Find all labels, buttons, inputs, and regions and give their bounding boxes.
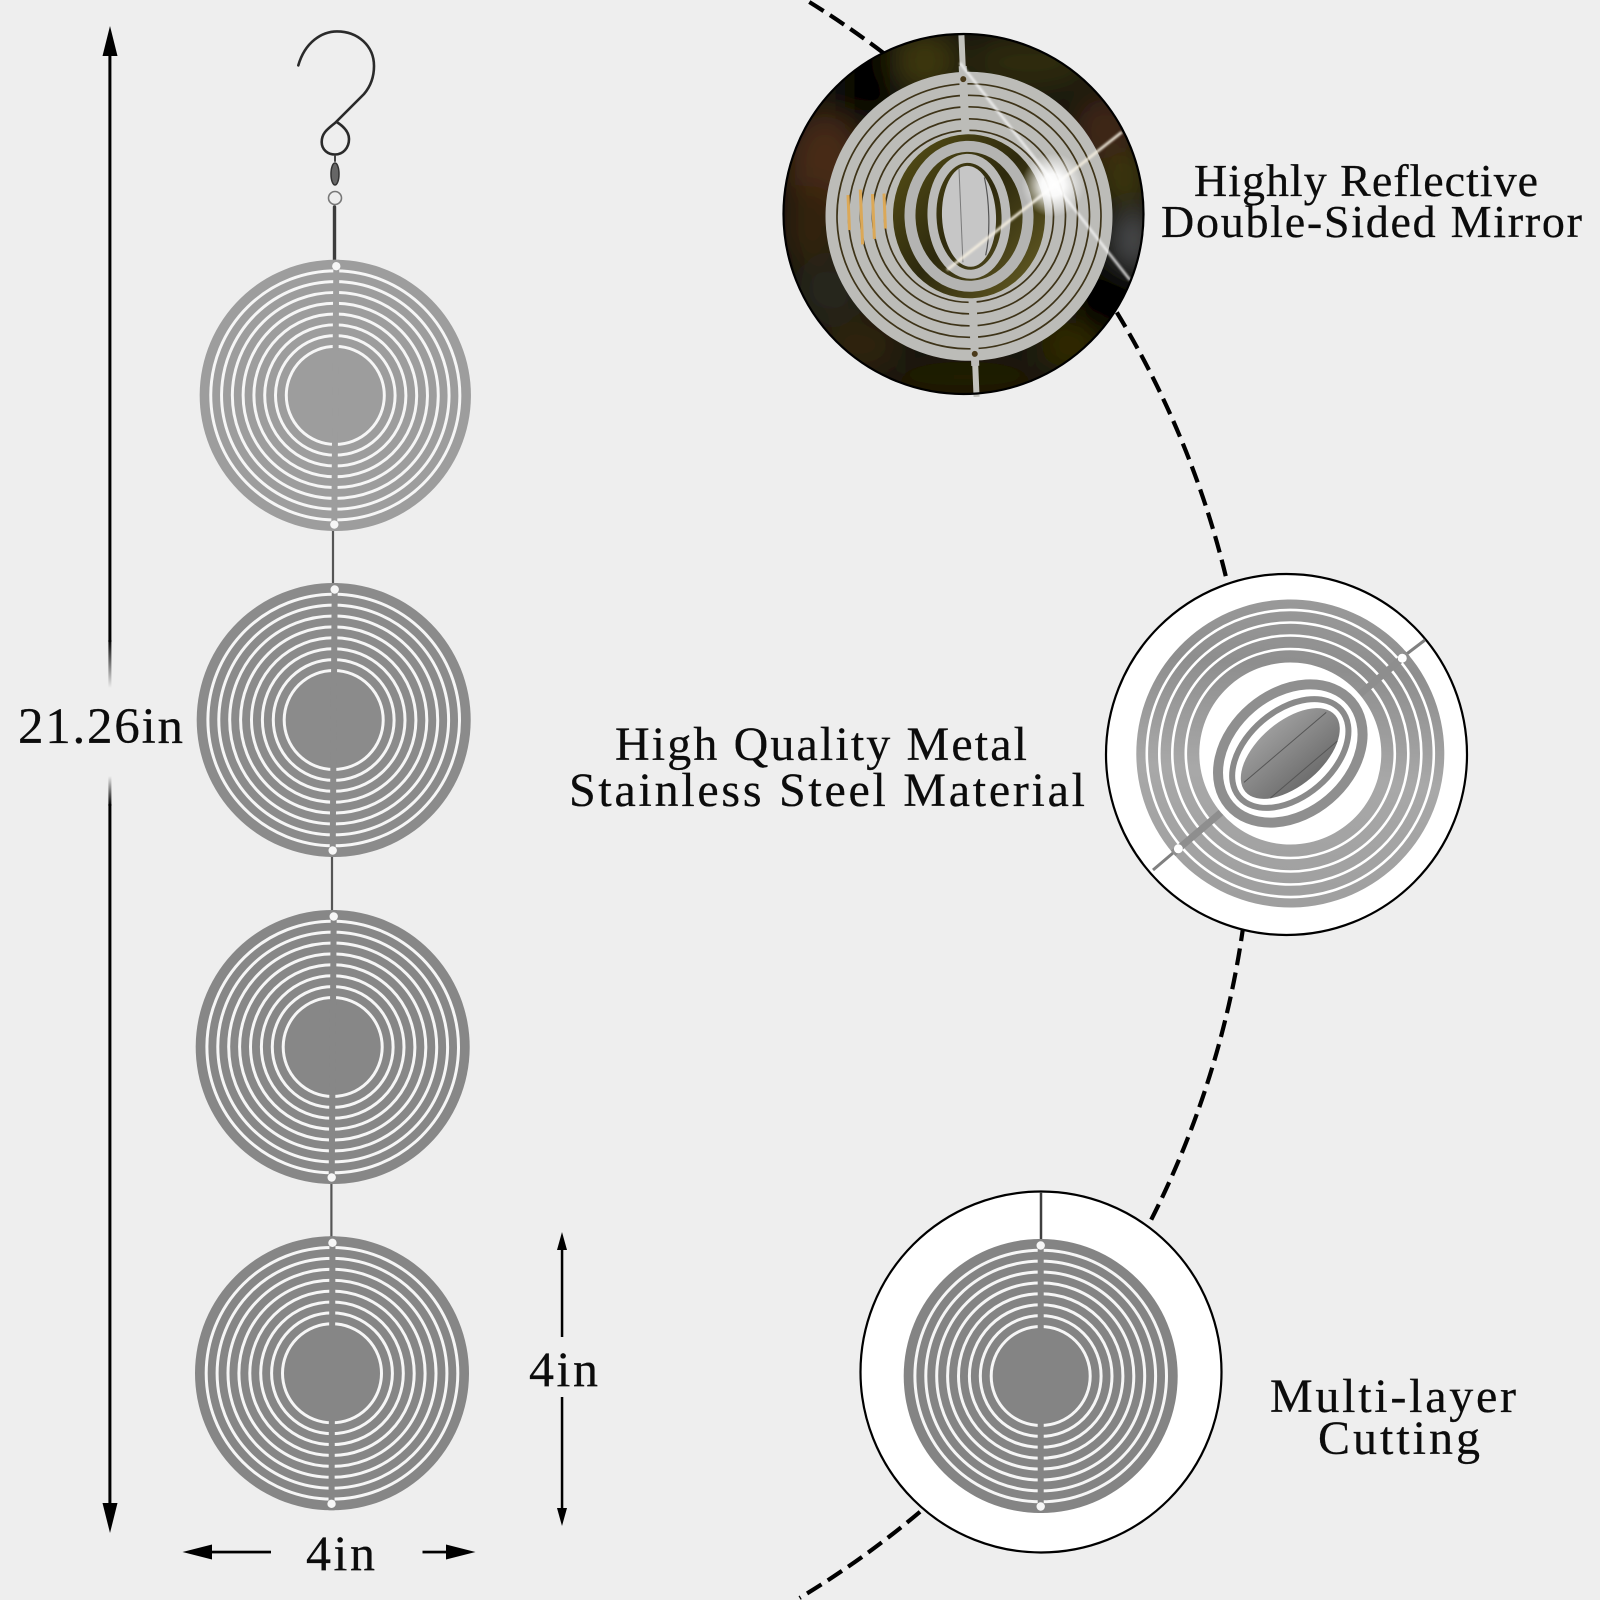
panel: mirror close-up circle: [780, 29, 1150, 403]
connector rod 1: [332, 531, 334, 587]
tilted spinner: [1073, 536, 1507, 971]
text: high quality metal stainless steel material: High Quality Metal: [615, 718, 1027, 771]
dashed arc connecting the feature circles: [800, 2, 1252, 1598]
connector rod 3: [330, 1184, 332, 1240]
photo background: [780, 30, 1150, 400]
arrow: disc width 4in: [182, 1544, 476, 1560]
spinner disc 1: [199, 259, 472, 532]
label: 4in height: 4in: [529, 1341, 598, 1397]
hanging rod: [1040, 1192, 1042, 1240]
gold reflections: [848, 189, 886, 245]
text: highly reflective double-sided mirror: [1161, 155, 1582, 247]
sparkle highlight: [947, 63, 1130, 280]
arrow: disc height 4in: [557, 1232, 567, 1526]
mirror spinner: [818, 29, 1120, 403]
text: high quality metal stainless steel material: Stainless Steel Material: [569, 764, 1085, 817]
spinner disc 4: [195, 1236, 469, 1511]
text: high quality metal stainless steel material: [569, 718, 1085, 817]
label: 21.26in: 21.26in: [18, 699, 183, 755]
axis rods: [1153, 640, 1425, 870]
rotated inner rings: [890, 131, 1048, 301]
spinner disc 2: [196, 582, 472, 858]
spinner disc 3: [195, 909, 471, 1185]
panel: multi-layer cutting circle: [860, 1192, 1222, 1552]
text: multi-layer cutting: [1270, 1370, 1516, 1465]
label: 4in width: 4in: [306, 1525, 375, 1581]
text: multi-layer cutting: Multi-layer: [1270, 1370, 1516, 1423]
panel: tilted stainless steel circle: [1073, 536, 1507, 971]
text: multi-layer cutting: Cutting: [1318, 1412, 1480, 1465]
text: highly reflective double-sided mirror: Double-Sided Mirror: [1161, 196, 1582, 247]
icon: S hook with clasp and rod: [298, 31, 374, 261]
arrow: overall height 21.26in: [102, 26, 118, 1533]
flat spinner: [904, 1239, 1178, 1513]
text: highly reflective double-sided mirror: Highly Reflective: [1194, 155, 1538, 206]
connector rod 2: [331, 857, 333, 913]
